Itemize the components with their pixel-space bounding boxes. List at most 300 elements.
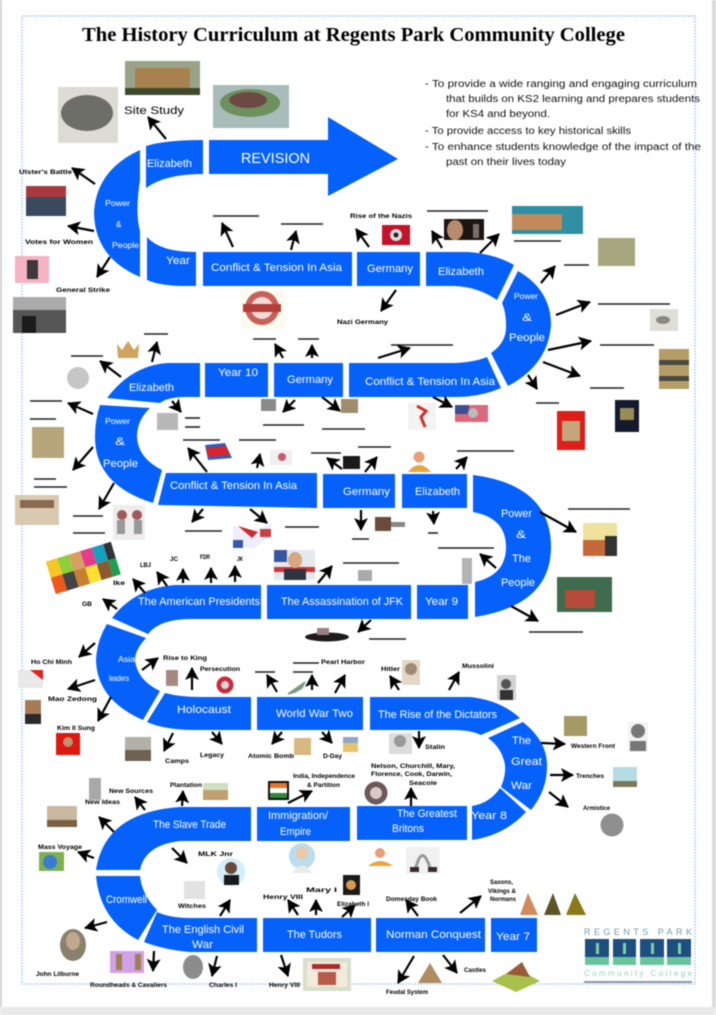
arrow: Germany row 2 up right <box>311 345 313 358</box>
road segment: Elizabeth (row 3): Elizabeth <box>415 486 460 498</box>
road segment: Norman Conquest: Norman Conquest <box>386 929 481 941</box>
small topic labels: Persecution <box>200 666 240 673</box>
small topic labels: & Partition <box>307 782 340 789</box>
small topic labels: GB <box>82 601 92 608</box>
road segment: The Rise of the Dictators: The Rise of the Dictators <box>378 709 497 721</box>
arrow: Power and People to first topic <box>72 168 95 184</box>
image: India flag <box>268 781 289 800</box>
road segment: Power and The People: & <box>516 529 527 541</box>
panel: blue curriculum road <box>94 117 551 952</box>
arrow: Great War 3 <box>549 792 568 807</box>
logo: Regents Park Community College <box>584 927 693 983</box>
small topic labels: Castles <box>464 967 486 974</box>
road segment: Power and People (left top) <box>94 150 140 277</box>
arrow: Elizabeth to Site Study <box>148 117 166 139</box>
image: grey square 1 <box>157 413 178 430</box>
arrow: World War Two to Atomic Bomb <box>272 732 282 744</box>
arrow: Slave Trade up 3 <box>99 817 114 832</box>
road segment: Elizabeth (row 1) <box>426 252 514 300</box>
image: small figure <box>166 670 178 686</box>
arrow: Germany row 3 down <box>360 510 362 530</box>
road segment: Immigration / Empire: Immigration/ <box>268 810 329 822</box>
arrow: Civil War down 2 <box>212 956 217 976</box>
road segment: The Assassination of JFK <box>267 585 411 619</box>
arrow: Slave Trade left <box>78 852 94 858</box>
arrow: Great War 1 <box>541 743 565 744</box>
road segment: The Greatest Britons: The Greatest <box>397 808 457 820</box>
small topic labels: Charles I <box>209 982 237 989</box>
road segment: Power and People (left middle): & <box>115 436 126 448</box>
small topic labels: Florence, Cook, Darwin, <box>371 771 452 778</box>
arrow: Power and The People to lower blank <box>511 606 538 621</box>
image: Elizabeth small <box>368 848 393 866</box>
road segment: Power and People (left middle) <box>95 405 162 503</box>
image: brown square <box>341 399 358 413</box>
image: castle photo <box>125 61 200 95</box>
arrow: Conflict to blank 2 <box>291 231 296 250</box>
road segment: The English Civil War: War <box>192 939 213 951</box>
arrow: Rise of Dictators to Mussolini <box>449 672 459 690</box>
small topic labels: Atomic Bomb <box>248 753 294 760</box>
image: Elizabeth figure <box>408 452 431 472</box>
arrow: Power right 4 <box>543 362 580 376</box>
image: battle scene <box>26 186 66 216</box>
road segment: Germany (row 1) <box>357 252 420 286</box>
arrow: Germany row 2 down left <box>283 400 295 412</box>
arrow: Germany row 2 down right <box>322 397 340 411</box>
image: small grey object <box>650 309 678 331</box>
image: castle aerial <box>213 85 289 128</box>
arrow: Elizabeth to portrait <box>432 231 442 248</box>
small topic labels: Rise of the Nazis <box>350 213 412 220</box>
image: English poster <box>15 495 59 525</box>
image: Western Front map <box>564 716 587 736</box>
image: boxers <box>113 505 145 540</box>
image: small vehicles <box>375 517 405 531</box>
arrow: Norman Conquest to Castles <box>443 955 457 973</box>
image: suffragettes <box>15 256 49 283</box>
road segment: The Great War: Great <box>511 756 542 768</box>
image: aeroplane <box>288 682 305 694</box>
road segment: The English Civil War <box>144 912 257 952</box>
image: camps photo <box>125 737 151 761</box>
arrow: Conflict row 3 down 2 <box>250 509 267 523</box>
road segment: The American Presidents <box>112 585 261 634</box>
image: sepia ship <box>47 806 77 827</box>
road segment: The Greatest Britons <box>357 806 467 840</box>
road segment: Elizabeth (top) <box>146 140 203 188</box>
image: castle engraving <box>58 87 118 143</box>
text block: curriculum aims: - To provide access to key historical skills <box>425 126 631 137</box>
small topic labels: India, Independence <box>293 773 355 780</box>
road segment: Power and The People: The <box>512 553 531 565</box>
arrow: Tudors up 2 <box>315 900 317 915</box>
small topic labels: Henry VIII <box>263 894 303 901</box>
road segment: Power and People (left middle): Power <box>105 417 130 426</box>
image: American presidents grid <box>46 542 121 594</box>
arrow: Germany to Rise of the Nazis <box>356 229 369 247</box>
image: grey remnant <box>358 570 372 581</box>
small topic labels: John Lilburne <box>36 971 79 978</box>
arrow: Norman Conquest to Feudal System <box>398 956 414 983</box>
small topic labels <box>19 105 616 996</box>
arrow: Elizabeth row 2 to crown <box>152 342 157 362</box>
small topic labels: New Sources <box>109 788 153 795</box>
arrow: Holocaust up <box>191 668 193 690</box>
image: Cold War flags <box>233 523 272 548</box>
small topic labels: Ho Chi Minh <box>31 659 72 666</box>
image: trade map <box>39 852 64 871</box>
arrow: Conflict to blank 1 <box>222 223 233 247</box>
arrow: World War Two up 1 <box>267 675 277 692</box>
arrow: Power right 5 <box>528 375 537 389</box>
arrow: Immigration up <box>288 791 312 803</box>
text block: curriculum aims <box>425 79 702 168</box>
road segment: The Tudors: The Tudors <box>287 929 342 941</box>
image: Roundheads purple <box>110 951 144 973</box>
small topic labels: Mussolini <box>462 663 494 670</box>
arrow: Conflict row 3 up 1 <box>188 448 207 472</box>
arrow: Elizabeth row 3 up <box>456 457 467 469</box>
arrow: Power and The People to poster <box>540 512 576 532</box>
road segment: World War Two: World War Two <box>276 708 353 720</box>
arrow: Power and People to Voices for Women <box>68 226 94 231</box>
arrow: Elizabeth row 2 to ship <box>100 361 121 377</box>
image: Tudor portrait <box>343 875 360 895</box>
road segment: Power and People (right top): People <box>509 332 545 344</box>
image: dark television <box>343 456 360 469</box>
road segment: Power and The People: People <box>501 577 535 589</box>
small topic labels: Western Front <box>571 743 616 750</box>
image: grey square 2 <box>261 399 276 411</box>
arrow: Holocaust to Legacy <box>212 732 222 744</box>
image: sepia print <box>598 238 635 266</box>
road segment: Germany (row 3) <box>323 474 395 508</box>
arrow: Conflict row 2 upward <box>378 348 410 358</box>
small topic labels: Stalin <box>425 744 445 751</box>
image: poster <box>659 349 689 389</box>
road segment: Power and People (left top): Power <box>105 199 130 208</box>
small topic labels: Nazi Germany <box>337 319 388 326</box>
arrow: Tudors up 1 <box>288 900 298 915</box>
road segment: Elizabeth (row 2): Elizabeth <box>129 382 174 394</box>
image: grey ship <box>67 367 89 389</box>
road segment: Asian leaders: Asian <box>118 655 140 664</box>
arrow: Slave Trade up 2 <box>135 797 145 810</box>
small topic labels: Hitler <box>381 666 401 673</box>
small topic labels: Legacy <box>200 752 224 759</box>
road segment: Germany (row 2) <box>274 363 343 397</box>
arrow: Slave Trade up 1 <box>182 791 183 806</box>
text block: curriculum aims: - To provide a wide ranging and engaging curriculum <box>425 79 697 90</box>
arrow: Tudors up 3 <box>342 905 355 917</box>
road segment: Immigration / Empire: Empire <box>280 826 311 838</box>
arrow: Cromwell to portrait <box>85 922 107 928</box>
image: colourful poster <box>583 523 617 556</box>
road segment: Immigration / Empire <box>257 807 350 841</box>
road segment: Conflict and Tension in Asia (row 3) <box>158 473 317 508</box>
road segment: Cromwell: Cromwell <box>106 894 147 906</box>
image: red portrait <box>56 733 80 755</box>
small topic labels: JC <box>170 556 178 563</box>
image: D-Day <box>343 737 358 752</box>
arrow: Germany row 3 up <box>365 457 377 472</box>
image: target badge <box>216 676 234 694</box>
road segment: Elizabeth (row 1): Elizabeth <box>438 266 484 278</box>
image: dark book <box>615 400 639 432</box>
arrows: every topic pointer <box>68 117 591 983</box>
arrow: Presidents 5 <box>234 566 236 582</box>
image: small hill <box>418 963 442 983</box>
road segment: Year 7: Year 7 <box>496 931 530 943</box>
road segment: Year 8 <box>471 788 526 840</box>
road segment: The American Presidents: The American Presidents <box>138 596 260 608</box>
small topic labels: Henry VIII <box>269 982 300 989</box>
logo: Regents Park Community College: Community College <box>584 969 693 978</box>
image: North Korean flag <box>205 443 232 460</box>
image: Greatest Britons round <box>364 782 388 804</box>
road segment: The English Civil War: The English Civil <box>162 924 244 936</box>
small topic labels: New Ideas <box>85 799 120 806</box>
road segment: Holocaust <box>147 693 251 730</box>
logo: Regents Park Community College: REGENTS PARK <box>584 927 692 937</box>
blank answer lines <box>30 211 670 672</box>
small topic labels: Mary I <box>306 887 337 894</box>
image: Queen silhouette <box>406 847 440 874</box>
arrow: Norman Conquest to invaders <box>460 896 481 913</box>
arrow: leaders 1 <box>79 643 95 657</box>
small topic labels: MLK Jnr <box>198 851 234 858</box>
image: JFK portrait <box>274 550 315 580</box>
small topic labels: Nelson, Churchill, Mary, <box>371 763 455 770</box>
road segment: The Great War <box>488 722 547 810</box>
small topic labels: Witches <box>178 903 206 910</box>
arrow: World War Two to D-Day <box>322 732 332 743</box>
road segment: Year <box>147 237 196 286</box>
text block: curriculum aims: past on their lives today <box>446 157 566 168</box>
arrow: Norman Conquest to Domesday <box>406 900 418 916</box>
small topic labels: Site Study <box>124 105 185 117</box>
image: leader with red flag <box>18 670 43 688</box>
image: Hitler portrait <box>402 660 420 685</box>
road segment: Conflict and Tension in Asia (row 1): Conflict & Tension In Asia <box>211 262 343 274</box>
small topic labels: Trenches <box>576 773 604 780</box>
road segment: Elizabeth (row 2) <box>107 363 200 403</box>
small topic labels: Vikings & <box>488 888 516 895</box>
road segment: The Rise of the Dictators <box>370 697 520 735</box>
road segment: Norman Conquest <box>376 918 485 952</box>
road segment: The Assassination of JFK: The Assassination of JFK <box>281 596 404 608</box>
small topic labels: Plantation <box>170 782 202 789</box>
arrow: World War Two up 3 <box>335 675 345 693</box>
arrow: Great War 2 <box>550 774 573 776</box>
road segment: Germany (row 1): Germany <box>367 263 413 275</box>
small topic labels: Camps <box>165 758 189 765</box>
image: brown portrait <box>25 700 41 724</box>
image: Mussolini portrait <box>497 675 516 700</box>
arrow: Assassination to JFK <box>318 566 332 583</box>
image: desert scene <box>203 783 228 800</box>
image: MLK portrait <box>217 858 245 886</box>
image: parchment map <box>32 427 64 458</box>
arrow: Presidents 6 <box>103 599 117 609</box>
image: coin <box>600 814 624 836</box>
small topic labels: Votes for Women <box>25 239 93 246</box>
arrow: Power middle 2 <box>73 447 93 470</box>
arrow: leaders 2 <box>142 658 158 670</box>
road segment: The Slave Trade <box>96 807 251 870</box>
road segment: Conflict and Tension in Asia (row 2) <box>349 357 501 397</box>
road segment: World War Two <box>257 697 363 730</box>
arrow: Presidents 1 <box>133 579 145 593</box>
small topic labels: Seacole <box>409 780 437 787</box>
road segment: Power and People (right top): & <box>522 312 533 324</box>
road segment: Year 10: Year 10 <box>218 367 258 379</box>
image: motte and bailey <box>492 962 540 992</box>
road segment: Asian leaders <box>96 624 160 720</box>
image: Cromwell portrait <box>60 929 86 961</box>
image: statue <box>462 558 472 584</box>
arrow: leaders 4 <box>98 697 111 721</box>
image: atomic bomb <box>294 738 311 755</box>
road segment: Elizabeth (row 3) <box>402 474 467 508</box>
small topic labels: FDR <box>200 554 210 561</box>
arrow: Power and The People to inner blank <box>480 554 496 568</box>
text block: curriculum aims: - To enhance students knowledge of the impact of the <box>425 142 702 153</box>
small topic labels: Normans <box>490 896 516 903</box>
small topic labels: General Strike <box>56 287 110 294</box>
title: The History Curriculum at Regents Park Community College <box>82 24 625 46</box>
image: South Korean flag <box>270 450 292 465</box>
image: Nazi flag <box>382 225 410 245</box>
road segment: Germany (row 2): Germany <box>287 374 333 386</box>
road segment: Holocaust: Holocaust <box>177 704 231 716</box>
image: American flag <box>455 405 488 422</box>
arrow: Germany row 2 up left <box>275 344 283 358</box>
arrow: Elizabeth row 3 down <box>433 511 434 524</box>
arrow: Presidents 2 <box>157 572 167 586</box>
arrow: Holocaust to Camps <box>164 733 173 751</box>
small topic labels: Mao Zedong <box>48 696 97 703</box>
arrow: Greatest Britons up <box>410 788 412 806</box>
small topic labels: Ike <box>113 580 125 587</box>
image: witches <box>184 881 205 899</box>
image: three invaders <box>520 893 586 915</box>
image: New Sources figure <box>89 778 101 800</box>
road segment: Year 8: Year 8 <box>471 810 507 822</box>
arrow: Conflict row 3 up 2 <box>257 454 260 468</box>
road segment: The Tudors <box>263 918 371 952</box>
image: moustached man <box>628 722 648 752</box>
arrow: Power right 3 <box>548 341 591 350</box>
small topic labels: Roundheads & Cavaliers <box>90 982 167 989</box>
small topic labels: D-Day <box>323 753 342 760</box>
road segment: Elizabeth (top): Elizabeth <box>147 158 192 170</box>
arrow: Elizabeth row 2 inner <box>172 401 181 412</box>
image: Armada painting <box>512 206 583 234</box>
arrow: Rise of Dictators to Stalin <box>418 731 420 748</box>
road segment: Asian leaders: leaders <box>109 674 129 683</box>
road segment: The Slave Trade: The Slave Trade <box>153 819 226 831</box>
image: trench scene <box>613 767 637 787</box>
arrow: Elizabeth to Armada <box>480 234 499 253</box>
arrow: Civil War down 1 <box>153 951 154 971</box>
small topic labels: Kim Il Sung <box>57 725 95 732</box>
road segment: Power and People (left middle): People <box>103 458 138 470</box>
arrow: Germany row 3 up left <box>327 458 342 469</box>
road segment: Power and People (left top): People <box>112 241 140 250</box>
arrow: World War Two up 2 <box>311 675 313 690</box>
arrow: Presidents 3 <box>182 569 184 583</box>
small topic labels: Domesday Book <box>386 896 437 903</box>
small topic labels: Mass Voyage <box>38 844 82 851</box>
small topic labels: Feudal System <box>386 989 428 996</box>
image: revision stamp <box>241 289 285 329</box>
arrow: Power right 1 <box>541 266 555 283</box>
arrow: Power and People to General Strike <box>97 257 110 277</box>
arrow: Power right 2 <box>556 302 590 315</box>
image: painting of crowd <box>557 577 612 612</box>
arrow: Conflict row 3 down 1 <box>192 509 203 522</box>
small topic labels: Ulster's Battle <box>19 169 72 176</box>
road segment: Power and The People <box>473 475 551 617</box>
image: Gandhi <box>289 843 315 873</box>
road segment: Conflict and Tension in Asia (row 2): Conflict & Tension In Asia <box>365 376 496 388</box>
road segment: Power and People (right top) <box>491 271 551 386</box>
image: JFK car <box>305 628 349 642</box>
image: Stalin portrait <box>389 733 412 754</box>
road segment: Year 9: Year 9 <box>425 596 458 608</box>
image: Charles I portrait <box>183 955 203 979</box>
road segment: Germany (row 3): Germany <box>343 486 391 498</box>
road segment: Power and The People: Power <box>501 508 532 520</box>
road segment: Revision arrow <box>209 117 398 196</box>
road segment: Year 10 <box>205 363 268 397</box>
road segment: The Great War: The <box>512 735 531 747</box>
arrow: leaders 3 <box>68 680 95 689</box>
image: Vietnam map <box>408 403 436 430</box>
small topic labels: LBJ <box>140 562 151 569</box>
arrow: Presidents 4 <box>210 568 212 583</box>
small topic labels: Saxons, <box>490 879 513 886</box>
arrow: Germany to Nazi Germany <box>381 290 396 311</box>
arrow: Civil War to Witches <box>220 900 230 916</box>
small topic labels: Pearl Harbor <box>321 659 366 666</box>
text block: curriculum aims: that builds on KS2 learning and prepares students <box>446 94 700 105</box>
arrow: Power middle 3 <box>99 483 114 509</box>
image: red book <box>557 411 585 450</box>
road segment: Power and People (left top): & <box>116 220 122 229</box>
road segment: Cromwell <box>96 876 157 940</box>
arrow: Power middle 1 <box>68 403 93 414</box>
arrow: Conflict row 2 to USA flag <box>433 397 452 407</box>
road segment: Year: Year <box>166 255 190 267</box>
small topic labels: Rise to King <box>163 655 207 662</box>
road segment: Year 7 <box>491 918 537 952</box>
road segment: The Greatest Britons: Britons <box>392 823 424 835</box>
arrow: Slave Trade inner <box>172 848 187 863</box>
small topic labels: JK <box>237 556 243 563</box>
road segment: Power and People (right top): Power <box>514 292 538 301</box>
road segment: Year 9 <box>417 585 468 619</box>
small topic labels: Elizabeth I <box>337 901 369 908</box>
arrow: Tudors down <box>281 955 288 976</box>
text block: curriculum aims: for KS4 and beyond. <box>446 109 550 120</box>
image: general strike crowd <box>13 297 66 333</box>
arrow: Rise of Dictators to Hitler <box>390 676 399 690</box>
image: Tudors poster <box>303 958 351 991</box>
image: crown <box>117 341 139 358</box>
